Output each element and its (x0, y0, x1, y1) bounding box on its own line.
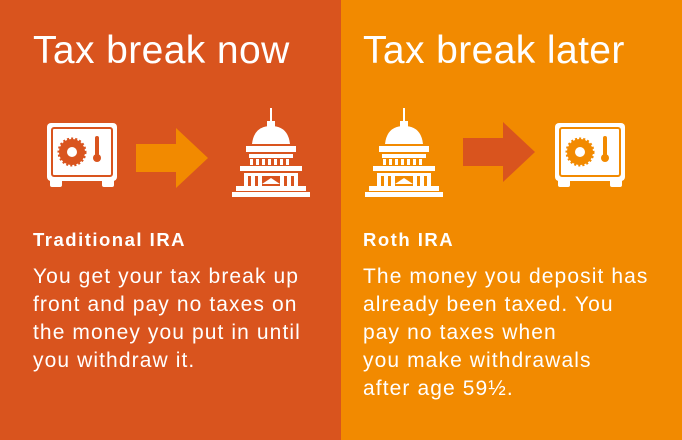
subheading right: Roth IRA (363, 229, 454, 250)
title left: Tax break now (33, 29, 290, 72)
panel: traditional IRA (0, 0, 341, 440)
body text right: already been taxed. You (363, 293, 614, 316)
body text left: you withdraw it. (33, 349, 195, 372)
body text left (33, 265, 301, 372)
body text left: You get your tax break up (33, 265, 299, 288)
arrow right (463, 122, 535, 182)
panel: roth IRA (341, 0, 682, 440)
body text right: you make withdrawals (363, 349, 592, 372)
body text right: The money you deposit has (363, 265, 648, 288)
body text left: front and pay no taxes on (33, 293, 298, 316)
body text left: the money you put in until (33, 321, 301, 344)
icon: safe right (555, 123, 625, 187)
icon: capitol right (365, 108, 443, 197)
icons row left (47, 108, 310, 197)
icon: safe (47, 123, 117, 187)
body text right (363, 265, 648, 400)
body text right: pay no taxes when (363, 321, 557, 344)
icons row right (365, 108, 625, 197)
title right: Tax break later (363, 29, 625, 72)
arrow (136, 128, 208, 188)
body text right: after age 59½. (363, 377, 514, 400)
subheading left: Traditional IRA (33, 229, 186, 250)
icon: capitol (232, 108, 310, 197)
